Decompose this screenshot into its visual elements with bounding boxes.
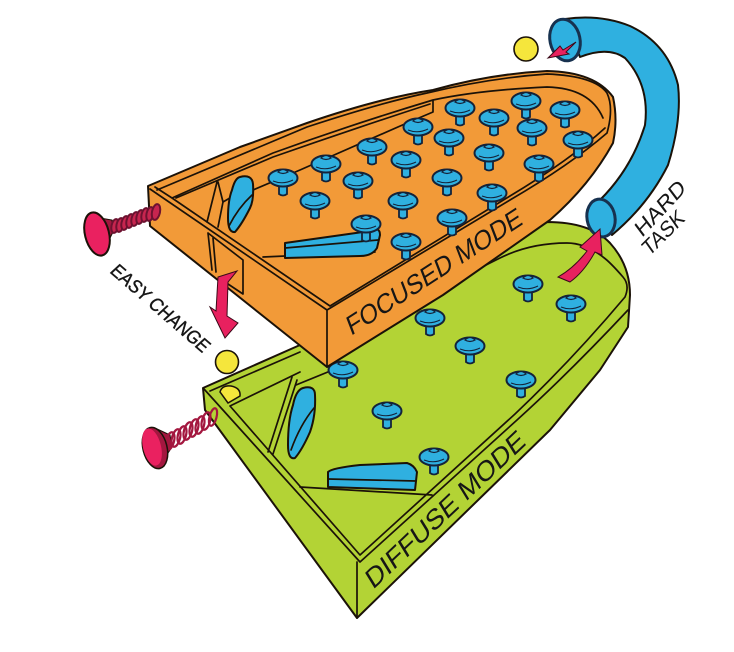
arrow: curved up into tube [558,229,602,282]
panel: focused mode board [148,71,616,367]
arrow: into tube top [548,42,576,58]
ball: top [514,37,538,61]
label: hard task [631,175,690,261]
ball: middle [216,350,238,374]
orange board body [148,71,616,367]
lane dividers [268,365,345,454]
notch in wall [208,233,243,294]
knob [80,210,114,258]
spring [110,203,162,234]
ball: in the chute [220,386,240,403]
arrow: easy change down [210,271,238,338]
plunger: diffuse mode [138,407,219,471]
lower flipper [263,229,380,258]
upper flipper [228,176,253,232]
top opening [546,16,584,64]
spring [164,407,219,451]
green board body [203,222,630,618]
label: focused mode: FOCUSED MODE [342,201,526,342]
orange board rim lines [150,74,610,367]
tube: hard task [546,16,679,239]
green pegs [328,276,586,474]
label: diffuse mode: DIFFUSE MODE [360,423,530,595]
lower flipper [300,463,432,495]
label: hard task: HARD [631,175,690,242]
stem cone [100,218,113,250]
upper flipper [288,387,315,458]
panel: diffuse mode board [203,222,630,618]
plunger: focused mode [80,203,162,258]
bottom opening [584,197,618,239]
green board rim lines [204,243,628,618]
knob [138,425,172,471]
label: easy change: EASY CHANGE [105,261,214,357]
label: hard task: TASK [639,205,689,261]
tube body [565,18,679,235]
lane divider [207,182,235,227]
stem cone [155,428,172,465]
orange pegs [268,92,592,260]
